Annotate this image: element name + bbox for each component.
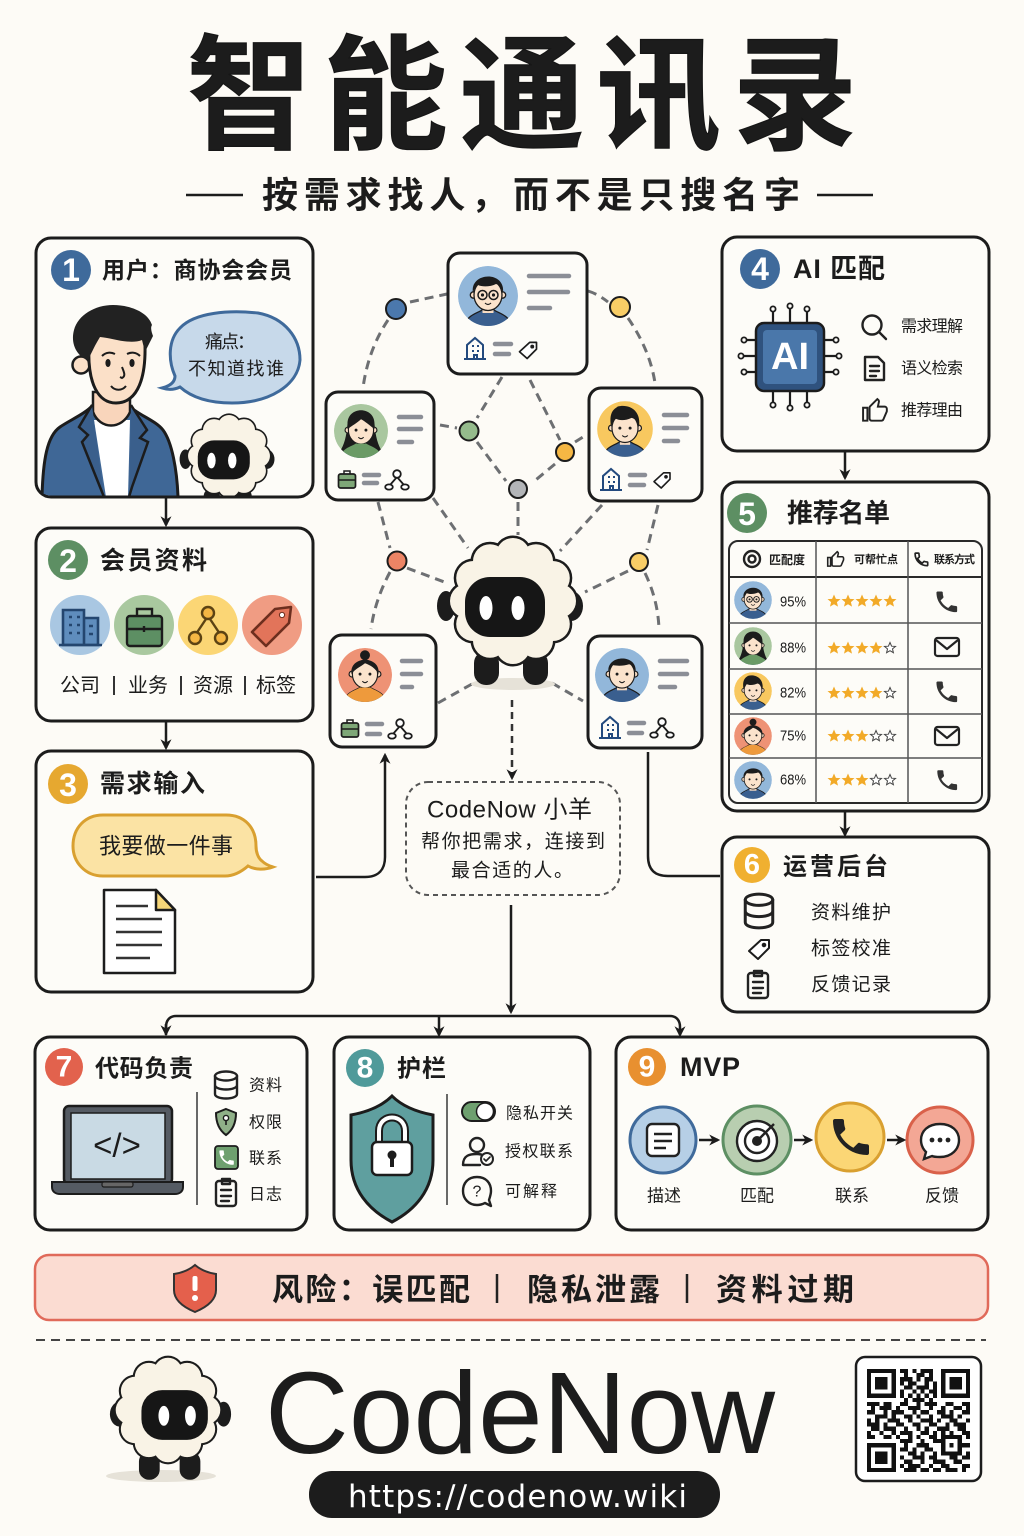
list: operations items: 资料维护 bbox=[811, 902, 891, 924]
list: AI steps: 推荐理由 bbox=[901, 402, 963, 420]
URL pill bbox=[309, 1471, 720, 1518]
callout: CodeNow sheep: 最合适的人。 bbox=[451, 860, 573, 882]
badge 9: 9 bbox=[639, 1050, 655, 1084]
arrow: 4 to 5 bbox=[844, 452, 846, 478]
step: contact: 联系 bbox=[835, 1186, 869, 1206]
panel 5: recommendation list bbox=[722, 482, 989, 811]
QR code bbox=[856, 1357, 981, 1481]
URL pill: https://codenow.wiki bbox=[348, 1479, 687, 1515]
badge 7: 7 bbox=[56, 1050, 72, 1084]
step: match: 匹配 bbox=[740, 1186, 774, 1206]
icon: shield lock bbox=[351, 1096, 433, 1222]
labels: 公司 bbox=[60, 675, 100, 697]
table header bbox=[744, 551, 975, 567]
badge 4 bbox=[740, 249, 780, 289]
heading: demand input: 需求输入 bbox=[100, 770, 205, 798]
step: describe: 描述 bbox=[647, 1186, 681, 1206]
badge 2 bbox=[48, 540, 88, 580]
arrow: 5 to 6 bbox=[844, 812, 846, 835]
heading: guardrails: 护栏 bbox=[397, 1056, 446, 1082]
list: guardrail items: ? bbox=[473, 1184, 482, 1200]
panel 6: operations console bbox=[722, 837, 989, 1012]
panel 8: guardrails bbox=[334, 1037, 590, 1230]
callout: CodeNow sheep: 帮你把需求，连接到 bbox=[421, 830, 605, 852]
list: AI steps bbox=[862, 316, 963, 421]
arrow: 1 to 2 bbox=[165, 498, 167, 525]
row 95% bbox=[734, 581, 957, 620]
mascot: central sheep bbox=[437, 536, 583, 690]
risk text bbox=[272, 1272, 854, 1308]
arrow: 2 to 3 bbox=[165, 722, 167, 748]
panel 2: member data bbox=[36, 528, 313, 721]
badge 6 bbox=[734, 847, 770, 883]
list: guardrail items: 可解释 bbox=[505, 1182, 557, 1200]
list: code items: 日志 bbox=[249, 1186, 282, 1204]
list: operations items: 反馈记录 bbox=[811, 974, 891, 996]
icon: laptop: </> bbox=[93, 1126, 141, 1164]
callout: CodeNow sheep bbox=[406, 782, 620, 895]
row 68%: 68% bbox=[780, 772, 806, 788]
labels: 业务 bbox=[128, 674, 168, 697]
badge 3 bbox=[48, 764, 88, 804]
table header: 联系方式 bbox=[934, 552, 975, 566]
row 75%: 75% bbox=[780, 728, 806, 744]
list: operations items bbox=[745, 894, 891, 998]
logo: CodeNow: CodeNow bbox=[265, 1348, 776, 1478]
badge 4: 4 bbox=[751, 251, 769, 287]
illustration: member in blazer bbox=[42, 305, 274, 511]
panel 1: user bbox=[36, 238, 313, 511]
speech bubble: request bbox=[73, 815, 273, 876]
panel 7: code in charge bbox=[35, 1037, 307, 1230]
labels bbox=[60, 674, 296, 697]
speech bubble: pain point: 痛点： bbox=[205, 332, 255, 352]
list: guardrail items bbox=[462, 1102, 573, 1206]
badge 6: 6 bbox=[744, 849, 760, 881]
member card E bbox=[588, 636, 702, 748]
heading: MVP: MVP bbox=[680, 1052, 740, 1082]
list: code items: 联系 bbox=[249, 1150, 282, 1168]
heading: code in charge: 代码负责 bbox=[95, 1056, 193, 1082]
icon: business bbox=[114, 595, 174, 655]
step: feedback: 反馈 bbox=[925, 1186, 959, 1206]
badge 8: 8 bbox=[357, 1052, 373, 1084]
heading: member data: 会员资料 bbox=[100, 547, 207, 575]
list: AI steps: 需求理解 bbox=[901, 318, 963, 336]
list: guardrail items: 隐私开关 bbox=[506, 1104, 573, 1122]
node: blue bbox=[386, 299, 406, 319]
list: code items bbox=[215, 1072, 282, 1206]
badge 5 bbox=[727, 493, 767, 533]
title: 智能通讯录 bbox=[187, 28, 857, 166]
icon: AI chip: AI bbox=[771, 336, 809, 378]
list: guardrail items: 授权联系 bbox=[505, 1142, 573, 1160]
risk text: 资料过期 bbox=[716, 1272, 854, 1308]
risk text: 隐私泄露 bbox=[527, 1272, 660, 1308]
arrow: member card E to 6 bbox=[648, 752, 720, 876]
badge 3: 3 bbox=[59, 767, 77, 803]
heading: user: 用户：商协会会员 bbox=[102, 257, 292, 283]
icon: tags bbox=[242, 595, 302, 655]
arrow: sheep to callout bbox=[511, 700, 513, 778]
heading: operations console: 运营后台 bbox=[783, 852, 888, 880]
badge 5: 5 bbox=[738, 496, 756, 532]
list: operations items: 标签校准 bbox=[811, 938, 891, 960]
badge 2: 2 bbox=[59, 543, 77, 579]
member card D bbox=[330, 635, 436, 747]
heading: AI matching: AI 匹配 bbox=[793, 254, 885, 284]
list: AI steps: 语义检索 bbox=[901, 360, 963, 378]
member card B bbox=[326, 392, 434, 500]
labels: 标签 bbox=[256, 674, 296, 697]
row 88%: 88% bbox=[780, 640, 806, 656]
heading: recommendation list: 推荐名单 bbox=[787, 498, 890, 528]
panel 3: demand input bbox=[36, 751, 313, 992]
callout: CodeNow sheep: CodeNow 小羊 bbox=[427, 796, 592, 824]
table header: 匹配度 bbox=[769, 552, 805, 567]
mascot: footer sheep bbox=[106, 1356, 231, 1482]
panel 9: MVP bbox=[616, 1037, 988, 1230]
icon: laptop bbox=[52, 1106, 183, 1194]
labels: 资源 bbox=[193, 674, 233, 697]
node: yellow bbox=[610, 297, 630, 317]
badge 1 bbox=[51, 250, 91, 290]
subtitle: 按需求找人，而不是只搜名字 bbox=[262, 174, 800, 216]
connection network bbox=[363, 291, 659, 703]
node: orange bbox=[556, 443, 574, 461]
step: feedback bbox=[907, 1107, 973, 1206]
list: code items: 资料 bbox=[249, 1076, 282, 1094]
icon: resources bbox=[178, 595, 238, 655]
risk banner bbox=[35, 1255, 988, 1320]
icon: warning shield bbox=[174, 1265, 216, 1312]
arrow: 3 to member card D bbox=[316, 755, 385, 877]
step: match bbox=[723, 1106, 791, 1206]
speech bubble: pain point bbox=[162, 312, 300, 403]
badge 1: 1 bbox=[62, 252, 80, 288]
row 82% bbox=[734, 672, 957, 711]
list: code items: 权限 bbox=[249, 1114, 282, 1132]
row 88% bbox=[734, 627, 959, 666]
node: gray bbox=[509, 480, 527, 498]
risk text: 风险：误匹配 bbox=[272, 1272, 470, 1308]
node: green bbox=[460, 422, 478, 440]
table header: 可帮忙点 bbox=[854, 552, 898, 566]
badge 8 bbox=[346, 1049, 384, 1087]
panel 4: AI matching bbox=[722, 237, 989, 451]
badge 9 bbox=[628, 1048, 666, 1086]
speech bubble: pain point: 不知道找谁 bbox=[188, 359, 284, 379]
icon: company bbox=[50, 595, 110, 655]
step: describe bbox=[630, 1107, 696, 1206]
node: light yellow bbox=[630, 553, 648, 571]
row 68% bbox=[734, 761, 957, 800]
row 75% bbox=[734, 717, 959, 756]
speech bubble: request: 我要做一件事 bbox=[99, 834, 233, 858]
row 95%: 95% bbox=[780, 594, 806, 610]
row 82%: 82% bbox=[780, 684, 806, 702]
table: recommendations bbox=[729, 541, 982, 803]
arrow: callout to bottom row bbox=[166, 905, 680, 1035]
badge 7 bbox=[45, 1048, 83, 1086]
member card C bbox=[589, 388, 702, 501]
member card A bbox=[448, 253, 587, 374]
step: contact bbox=[816, 1103, 884, 1206]
icon: AI chip bbox=[738, 303, 842, 411]
node: coral bbox=[388, 552, 406, 570]
icon: document bbox=[104, 890, 175, 973]
arrows between steps bbox=[699, 1139, 904, 1141]
